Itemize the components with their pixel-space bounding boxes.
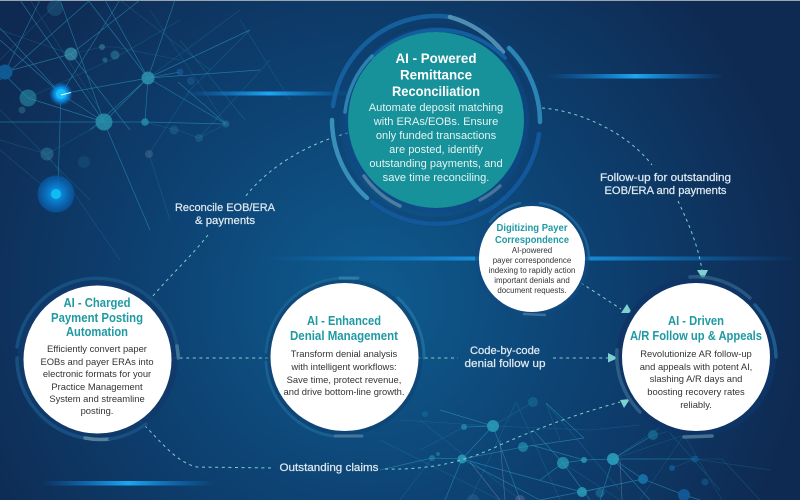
- body text: are posted, identify: [389, 144, 483, 156]
- white disc: [24, 286, 172, 434]
- label: Reconcile EOB/ERA & payments: [175, 202, 276, 227]
- body text: slashing A/R days and: [650, 373, 742, 384]
- connector: payer correspondence: [581, 283, 632, 313]
- heading: Automation: [66, 325, 128, 339]
- body text: Practice Management: [51, 381, 143, 392]
- label: Follow-up for outstanding: EOB/ERA and payments: [604, 185, 727, 197]
- heading: AI - Driven: [668, 314, 724, 328]
- body text: Save time, protect revenue,: [287, 374, 401, 385]
- body text: boosting recovery rates: [647, 386, 745, 397]
- heading: Payment Posting: [51, 311, 143, 325]
- network graphic: bottom right: [380, 397, 770, 500]
- panel: AI-Charged Payment Posting Automation: [17, 278, 178, 440]
- body text: [369, 102, 503, 184]
- heading: [495, 223, 569, 246]
- heading: Reconciliation: [392, 83, 480, 99]
- panel: AI-Driven A/R Follow up & Appeals: [616, 277, 776, 437]
- body text: outstanding payments, and: [369, 158, 503, 170]
- label: Follow-up for outstanding: Follow-up for outstanding: [600, 172, 731, 184]
- heading: [290, 314, 399, 343]
- body text: and appeals with potent AI,: [640, 361, 752, 372]
- heading: [51, 296, 143, 339]
- label: Code-by-code denial follow up: [464, 345, 546, 370]
- body text: EOBs and payer ERAs into: [40, 356, 154, 367]
- connector: denial: [173, 353, 618, 362]
- body text: [640, 348, 752, 410]
- label: Code-by-code denial follow up: denial follow up: [464, 358, 546, 370]
- heading: Digitizing Payer: [496, 223, 568, 234]
- label: Reconcile EOB/ERA & payments: & payments: [195, 215, 256, 227]
- label: Code-by-code denial follow up: Code-by-code: [470, 345, 540, 357]
- large glow orb: [38, 176, 74, 212]
- body text: only funded transactions: [376, 130, 497, 142]
- heading: Correspondence: [495, 235, 569, 246]
- body text: and drive bottom-line growth.: [284, 386, 404, 397]
- teal disc: [348, 32, 524, 208]
- body text: [40, 343, 154, 416]
- connector: outstanding claims: [140, 399, 630, 469]
- body text: Automate deposit matching: [369, 102, 503, 114]
- heading: [630, 314, 762, 343]
- heading: Denial Management: [290, 329, 399, 343]
- panel: Digitizing Payer Correspondence: [475, 202, 589, 316]
- connector: follow-up: [542, 108, 708, 280]
- label: Outstanding claims: Outstanding claims: [280, 462, 379, 474]
- white disc: [270, 283, 418, 431]
- connector: reconcile: [147, 133, 348, 303]
- body text: AI-powered: [512, 246, 552, 255]
- label: Follow-up for outstanding: [600, 172, 731, 197]
- body text: payer correspondence: [493, 256, 572, 265]
- body text: [284, 348, 404, 397]
- body text: save time reconciling.: [383, 172, 489, 184]
- light streaks: [40, 74, 800, 486]
- body text: important denials and: [494, 276, 570, 285]
- glowing node: [49, 82, 73, 106]
- body text: document requests.: [497, 286, 567, 295]
- body text: posting.: [81, 405, 113, 416]
- body text: System and streamline: [49, 393, 145, 404]
- heading: [392, 50, 480, 99]
- body text: Revolutionize AR follow-up: [640, 348, 752, 359]
- heading: AI - Powered: [396, 50, 476, 66]
- body text: [489, 246, 575, 295]
- panel: AI-Enhanced Denial Management: [266, 278, 424, 436]
- body text: with intelligent workflows:: [290, 361, 397, 372]
- heading: AI - Charged: [64, 296, 130, 310]
- heading: A/R Follow up & Appeals: [630, 329, 762, 343]
- network graphic: top left: [0, 0, 290, 260]
- body text: electronic formats for your: [43, 368, 151, 379]
- white disc: [622, 283, 770, 431]
- panel: AI-Powered Remittance Reconciliation: [332, 16, 540, 224]
- body text: indexing to rapidly action: [489, 266, 575, 275]
- body text: reliably.: [680, 399, 712, 410]
- body text: with ERAs/EOBs. Ensure: [373, 116, 498, 128]
- heading: AI - Enhanced: [307, 314, 381, 328]
- heading: Remittance: [400, 66, 472, 82]
- white disc: [479, 206, 585, 312]
- body text: Efficiently convert paper: [47, 343, 147, 354]
- label: Reconcile EOB/ERA & payments: Reconcile EOB/ERA: [175, 202, 276, 214]
- body text: Transform denial analysis: [291, 348, 398, 359]
